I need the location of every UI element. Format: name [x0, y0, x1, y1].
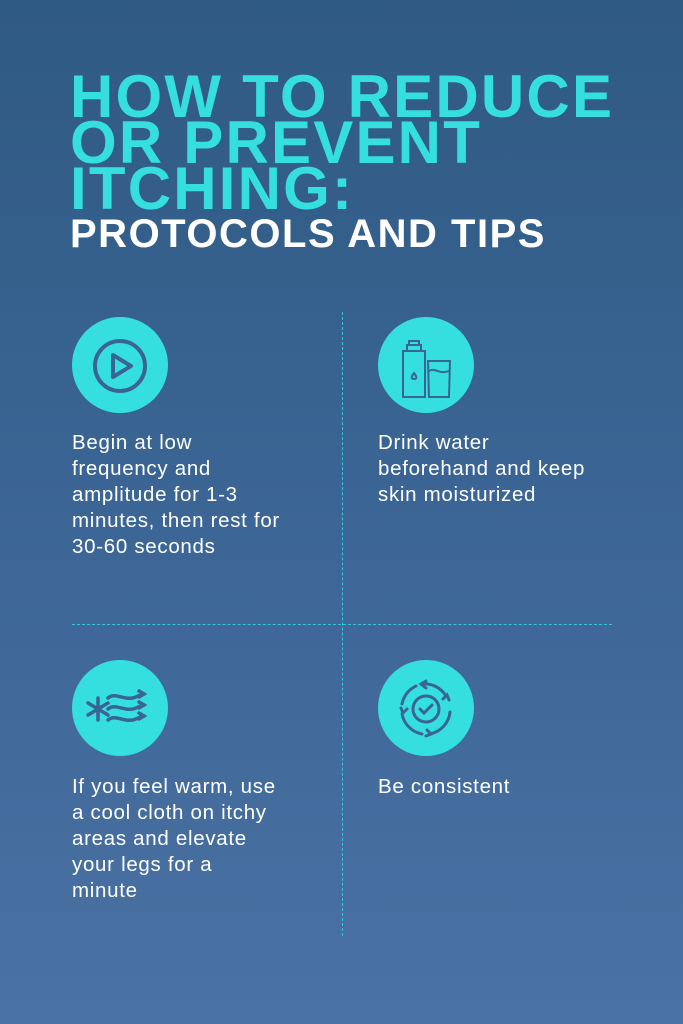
text [72, 431, 280, 558]
title: OR PREVENT [70, 109, 482, 176]
text: 30-60 seconds [72, 535, 216, 558]
icon: bottle and glass [378, 317, 474, 413]
text: minutes, then rest for [72, 509, 280, 532]
panel: water [378, 317, 585, 506]
text: beforehand and keep [378, 457, 585, 480]
text: If you feel warm, use [72, 775, 276, 798]
icon: snowflake wind [72, 660, 168, 756]
panel: frequency [72, 317, 280, 558]
subtitle: PROTOCOLS AND TIPS [70, 212, 546, 256]
text: Drink water [378, 431, 489, 454]
text: minute [72, 879, 138, 902]
icon: play [72, 317, 168, 413]
text [378, 431, 585, 506]
text: Begin at low [72, 431, 192, 454]
text: frequency and [72, 457, 211, 480]
text [72, 775, 276, 902]
title [70, 63, 614, 222]
text: amplitude for 1-3 [72, 483, 238, 506]
title: ITCHING: [70, 155, 354, 222]
text: a cool cloth on itchy [72, 801, 267, 824]
text: skin moisturized [378, 483, 536, 506]
text: your legs for a [72, 853, 212, 876]
text: Be consistent [378, 775, 510, 798]
icon: cycle check [378, 660, 474, 756]
title: HOW TO REDUCE [70, 63, 614, 130]
text: areas and elevate [72, 827, 247, 850]
panel: consistent [378, 660, 510, 798]
panel: cool [72, 660, 276, 902]
